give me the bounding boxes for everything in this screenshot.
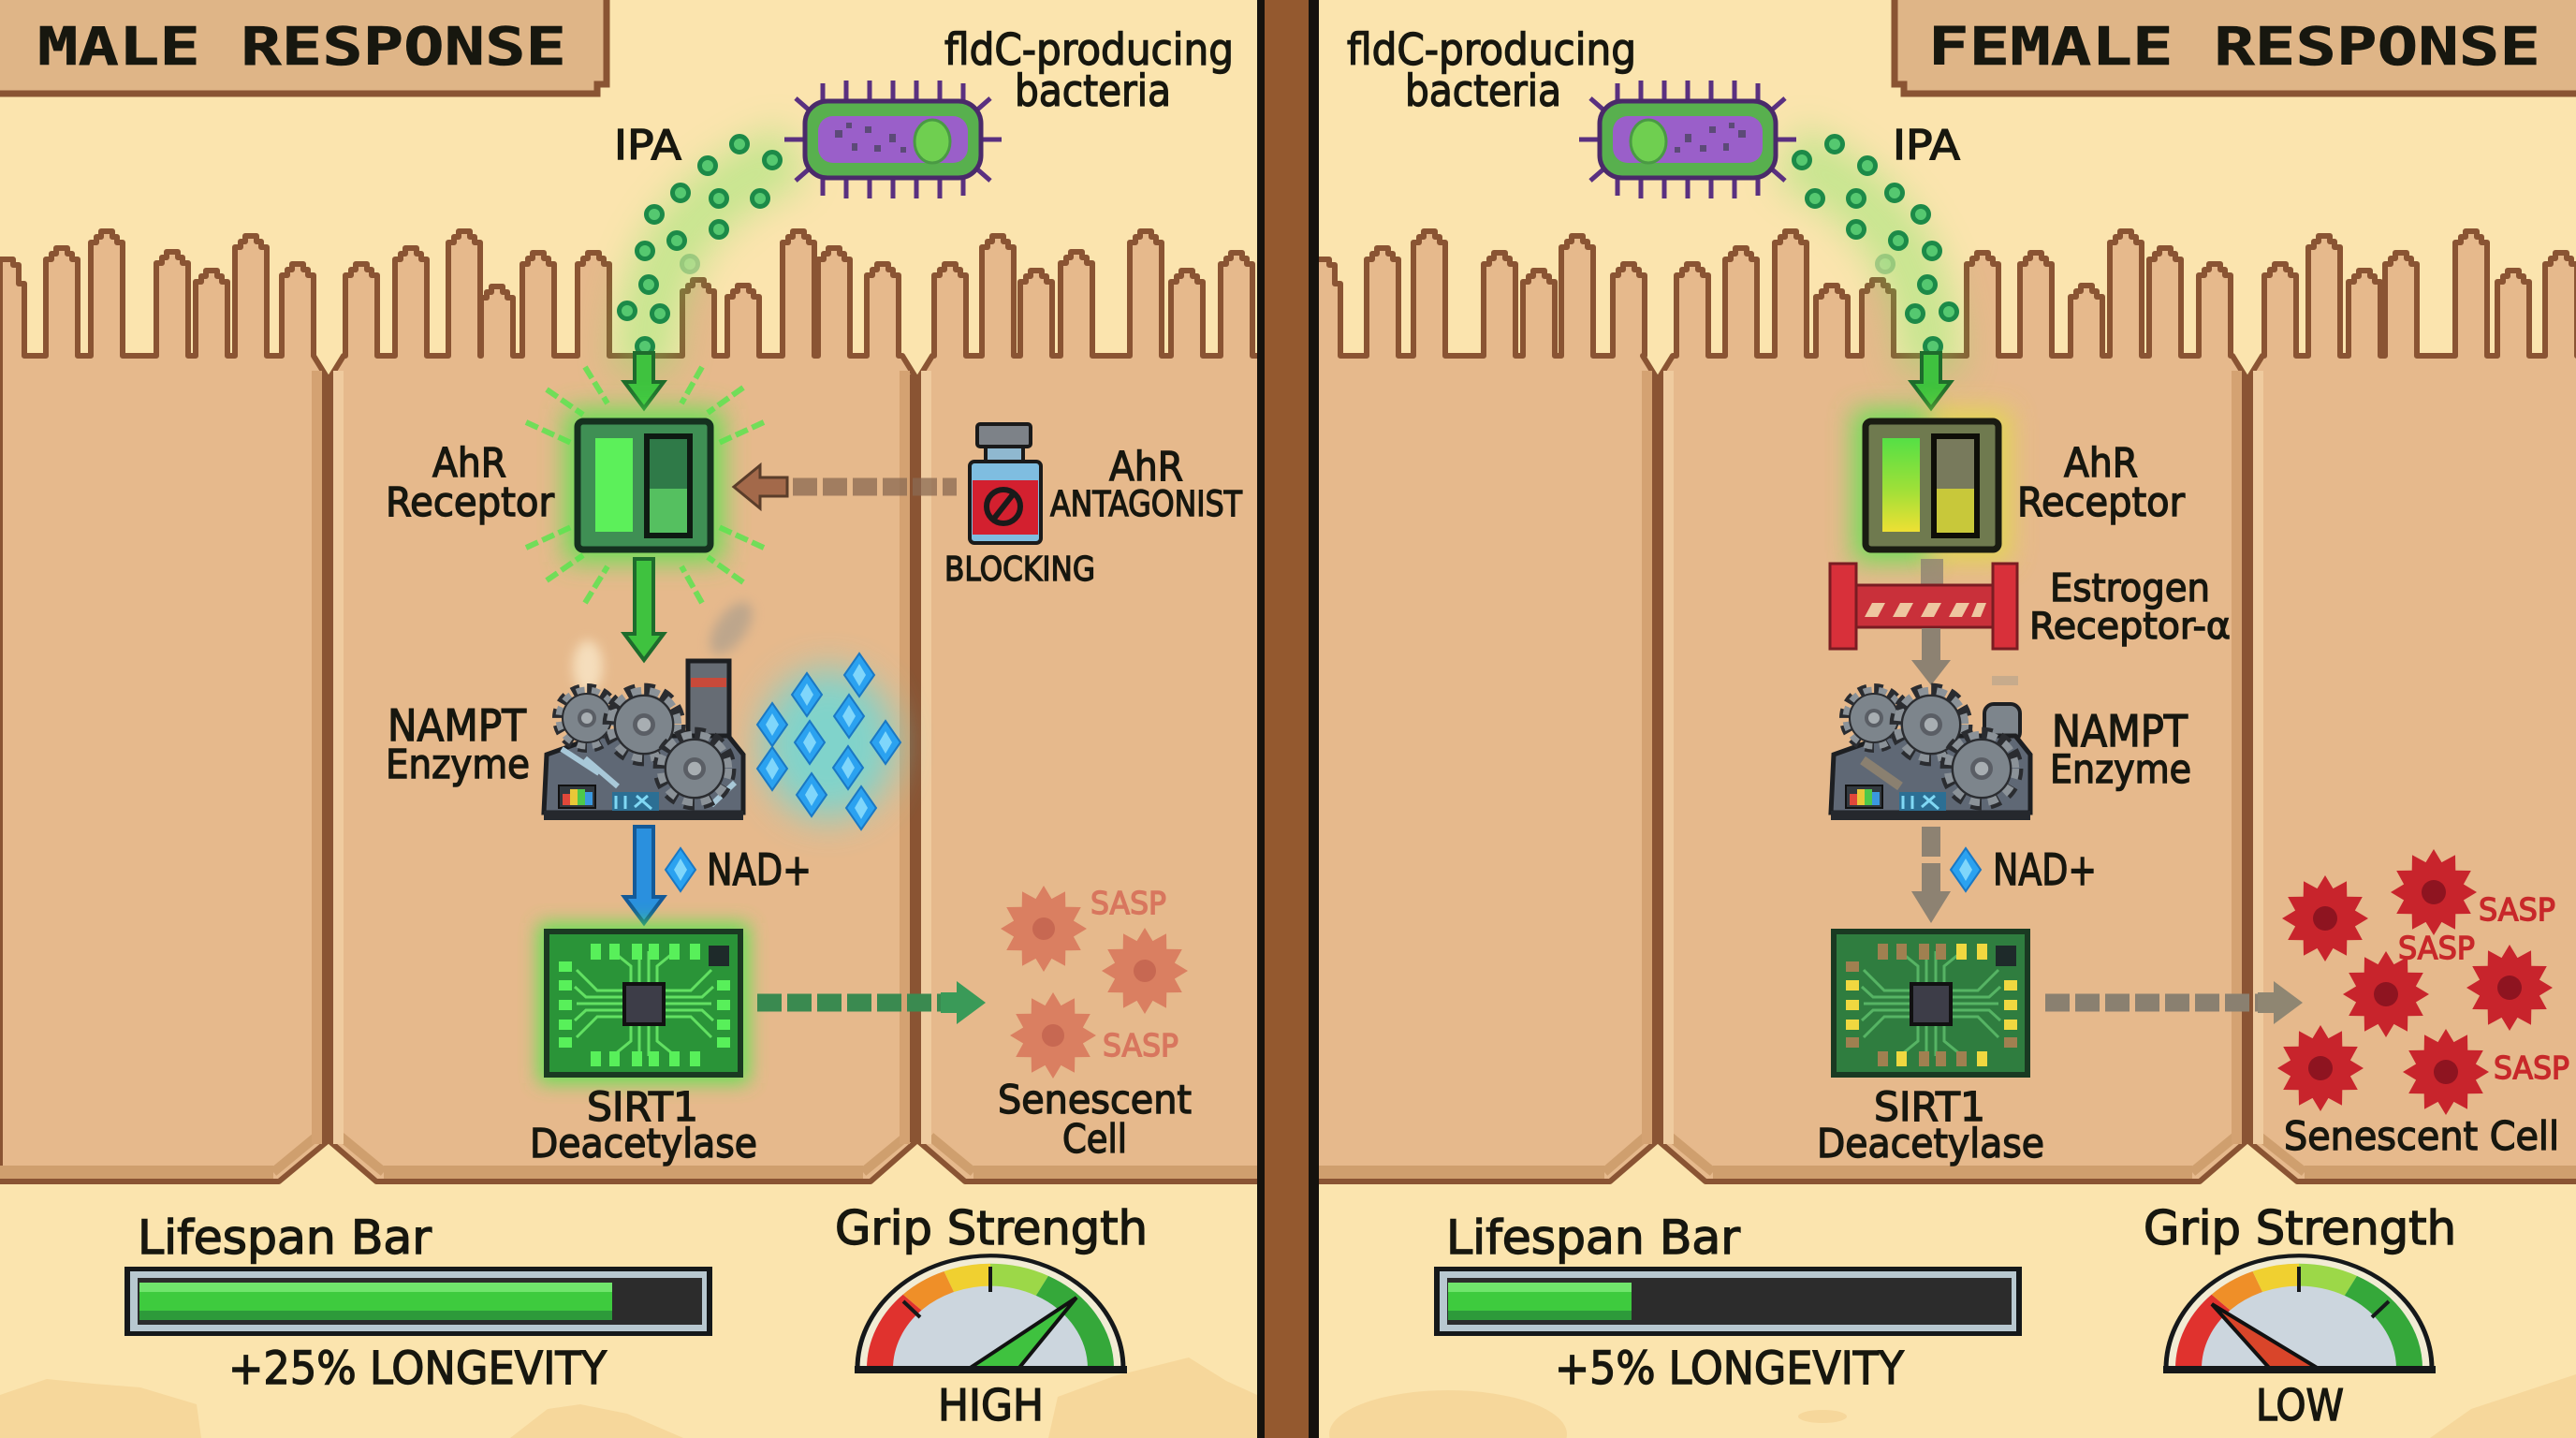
label: longevity: +5% LONGEVITY xyxy=(1555,1343,1905,1395)
gauge: high xyxy=(855,1255,1127,1373)
icon: active senescent cells xyxy=(2277,849,2553,1115)
grip strength heading: Grip Strength xyxy=(835,1201,1148,1255)
label: AhR receptor: Receptor xyxy=(2017,479,2185,526)
arrow: weak signal to senescent cells xyxy=(2045,981,2303,1024)
label: low: LOW xyxy=(2256,1380,2344,1431)
label: SIRT1 deacetylase: Deacetylase xyxy=(530,1121,757,1167)
arrow: AhR to NAMPT xyxy=(624,559,664,660)
arrow: blocked antagonist dashed xyxy=(734,465,957,508)
icon: SIRT1 chip active xyxy=(538,923,749,1083)
left panel: male response xyxy=(0,0,1264,1431)
label: bacteria: bacteria xyxy=(1015,66,1171,116)
gauge: low xyxy=(2163,1255,2436,1373)
icon: AhR receptor switch weak xyxy=(1853,409,2011,562)
centre divider xyxy=(1257,0,1319,1438)
label: senescent cell: Cell xyxy=(1062,1116,1127,1162)
label: AhR receptor xyxy=(2017,440,2185,526)
epithelium cells with microvilli xyxy=(0,231,1264,1181)
lifespan bar 25 percent xyxy=(124,1267,712,1336)
label: bacteria xyxy=(1347,24,1636,116)
label: NAMPT enzyme xyxy=(2050,706,2191,792)
label: NAMPT enzyme: Enzyme xyxy=(386,741,530,788)
label: longevity: +25% LONGEVITY xyxy=(228,1343,607,1395)
icon: NAMPT factory dim xyxy=(1831,676,2030,820)
label: bacteria: fldC-producing xyxy=(944,24,1234,75)
IPA stream glow xyxy=(644,154,796,374)
label: senescent cell: Senescent Cell xyxy=(2284,1113,2559,1159)
label: blocking: BLOCKING xyxy=(944,550,1095,589)
NAD+ diamonds xyxy=(757,653,900,829)
label: AhR antagonist xyxy=(1050,444,1242,524)
label: estrogen receptor alpha xyxy=(2029,565,2231,648)
IPA particles xyxy=(1793,137,1956,354)
label: bacteria xyxy=(944,24,1234,116)
grip strength heading: Grip Strength xyxy=(2144,1201,2456,1255)
arrow: NAD+ to SIRT1 xyxy=(624,827,664,923)
icon: NAMPT factory active xyxy=(544,595,760,820)
label: SIRT1 deacetylase xyxy=(1817,1084,2044,1167)
arrow: weak NAD+ to SIRT1 xyxy=(1911,827,1951,923)
label: AhR receptor xyxy=(386,440,554,526)
IPA particles xyxy=(620,137,781,354)
label: AhR receptor: Receptor xyxy=(386,479,554,526)
label: estrogen receptor alpha: Estrogen xyxy=(2050,565,2210,610)
epithelium cells with microvilli xyxy=(1310,231,2576,1181)
arrow: IPA into AhR xyxy=(624,353,664,408)
label: SIRT1 deacetylase: Deacetylase xyxy=(1817,1121,2044,1167)
sand patches at the bottom xyxy=(0,1357,2576,1438)
icon: fldC bacteria xyxy=(784,81,1002,198)
title plate: male response xyxy=(0,0,607,94)
lifespan heading: Lifespan Bar xyxy=(1446,1211,1740,1265)
label: AhR receptor: AhR xyxy=(432,440,506,487)
label: senescent cell xyxy=(998,1077,1192,1162)
label: NAD+ xyxy=(666,844,812,895)
label: bacteria: bacteria xyxy=(1405,66,1561,116)
label: senescent cell: Senescent xyxy=(998,1077,1192,1123)
label: estrogen receptor alpha: Receptor-α xyxy=(2029,606,2231,648)
title plate: male response: MALE RESPONSE xyxy=(37,17,566,78)
label: NAMPT enzyme: NAMPT xyxy=(2052,706,2188,756)
label: AhR receptor: AhR xyxy=(2064,440,2138,487)
label: SIRT1 deacetylase xyxy=(530,1084,757,1167)
label: faded SASP: SASP xyxy=(1090,885,1166,921)
icon: estrogen receptor alpha barrier xyxy=(1830,559,2017,649)
lifespan bar 5 percent xyxy=(1434,1267,2022,1336)
label: faded SASP: SASP xyxy=(1103,1027,1178,1064)
label: NAD+ xyxy=(1951,844,2097,895)
label: SASP: SASP xyxy=(2479,891,2555,928)
lifespan heading: Lifespan Bar xyxy=(138,1211,432,1265)
label: faded SASP xyxy=(1090,885,1178,1064)
icon: AhR receptor switch active xyxy=(526,367,764,603)
label: NAMPT enzyme xyxy=(386,700,530,788)
label: NAMPT enzyme: NAMPT xyxy=(388,700,527,751)
arrow: weak signal to NAMPT xyxy=(1911,628,1951,685)
right panel: female response xyxy=(1310,0,2576,1431)
arrow: SIRT1 clears senescent cells xyxy=(757,981,986,1024)
label: high: HIGH xyxy=(938,1380,1044,1431)
label: NAMPT enzyme: Enzyme xyxy=(2050,746,2191,792)
icon: SIRT1 chip dim xyxy=(1834,932,2027,1075)
label: bacteria: fldC-producing xyxy=(1347,24,1636,75)
icon: fldC bacteria xyxy=(1579,81,1796,198)
label: SASP xyxy=(2398,891,2569,1086)
label: SIRT1 deacetylase: SIRT1 xyxy=(587,1084,698,1131)
NAD+ glow cloud xyxy=(761,669,896,819)
label: NAD+: NAD+ xyxy=(707,844,812,895)
icon: antagonist vial xyxy=(970,424,1041,543)
label: NAD+: NAD+ xyxy=(1993,844,2097,895)
icon: faded senescent cells xyxy=(1001,886,1188,1078)
label: IPA: IPA xyxy=(614,122,681,169)
label: AhR antagonist: AhR xyxy=(1109,444,1183,491)
label: SIRT1 deacetylase: SIRT1 xyxy=(1874,1084,1985,1131)
label: SASP: SASP xyxy=(2494,1049,2569,1086)
label: AhR antagonist: ANTAGONIST xyxy=(1050,484,1242,524)
arrow: IPA into AhR xyxy=(1911,353,1951,408)
title plate: female response: FEMALE RESPONSE xyxy=(1928,17,2540,78)
label: SASP: SASP xyxy=(2398,930,2475,966)
IPA stream glow xyxy=(1788,154,1931,374)
label: IPA: IPA xyxy=(1893,122,1960,169)
title plate: female response xyxy=(1895,0,2576,94)
